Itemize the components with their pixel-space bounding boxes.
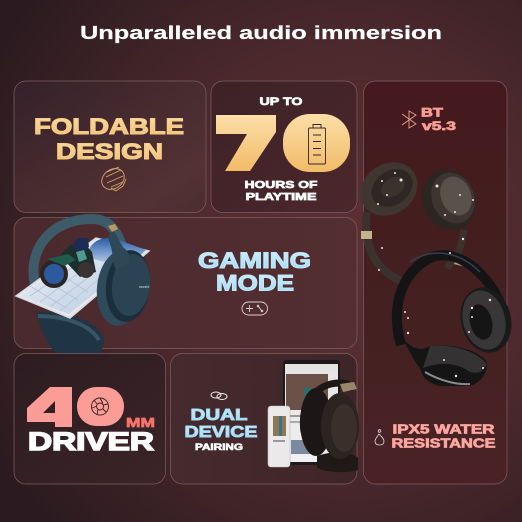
text: ipx5 water resistance bbox=[392, 422, 496, 450]
motorbike bbox=[42, 238, 96, 286]
panel: 70 hours of playtime bbox=[211, 81, 357, 212]
heading: gaming mode: GAMING bbox=[198, 248, 311, 273]
text: pairing: PAIRING bbox=[195, 442, 243, 452]
image: brown and black waterproof headphones bbox=[350, 151, 518, 386]
brown right cup bbox=[413, 162, 485, 238]
panel: gaming mode bbox=[14, 218, 357, 348]
number: 0 with battery bbox=[283, 114, 350, 172]
number: 4 bbox=[27, 387, 72, 427]
headband bbox=[33, 219, 127, 285]
icon: driver aperture bbox=[92, 398, 108, 415]
heading: foldable design: FOLDABLE bbox=[34, 114, 184, 139]
text: hours of playtime bbox=[244, 179, 318, 203]
black band bbox=[397, 255, 503, 345]
icon: bluetooth bbox=[402, 111, 416, 128]
heading: foldable design bbox=[34, 114, 184, 164]
brown band bbox=[366, 212, 408, 284]
text: bt v5.3: BT bbox=[421, 108, 443, 120]
icon: battery bbox=[308, 124, 326, 164]
icon: game controller pill bbox=[242, 302, 268, 315]
text: hours of playtime: PLAYTIME bbox=[246, 191, 316, 203]
black bottom cup bbox=[404, 340, 487, 386]
heading: dual device bbox=[184, 407, 258, 441]
panel: dual device pairing bbox=[170, 354, 359, 484]
phone screen bbox=[16, 238, 149, 318]
brown left cup bbox=[350, 151, 428, 227]
heading: gaming mode bbox=[198, 248, 311, 296]
image: phone bbox=[268, 406, 290, 467]
water droplets bbox=[377, 172, 491, 377]
icon: water drop bbox=[375, 430, 384, 445]
heading: dual device: DUAL bbox=[190, 407, 248, 424]
black right cup bbox=[454, 282, 518, 358]
text: mm: MM bbox=[126, 415, 155, 430]
heading: foldable design: DESIGN bbox=[56, 139, 163, 164]
text: hours of playtime: HOURS OF bbox=[244, 179, 318, 191]
panel: 40mm driver bbox=[14, 354, 166, 484]
number: 7 bbox=[216, 115, 276, 171]
text: bt v5.3: v5.3 bbox=[422, 121, 456, 133]
title: Unparalleled audio immersion bbox=[80, 23, 442, 43]
icon: link bbox=[211, 392, 227, 400]
icon: folded headphones bbox=[98, 164, 128, 194]
heading: dual device: DEVICE bbox=[184, 424, 258, 441]
text: ipx5 water resistance: RESISTANCE bbox=[392, 436, 496, 450]
bottom ear cup bbox=[36, 312, 104, 358]
text: bt v5.3 bbox=[421, 108, 456, 133]
number: 0 with aperture bbox=[77, 387, 124, 426]
image: tablet bbox=[283, 360, 340, 465]
image: blue headphones with phone and motorbike bbox=[16, 219, 154, 358]
heading: gaming mode: MODE bbox=[216, 270, 294, 296]
text: driver: DRIVER bbox=[28, 428, 154, 456]
panel: bluetooth and water resistance bbox=[364, 81, 507, 484]
panel: foldable design bbox=[14, 81, 206, 212]
image: dark headphones bbox=[300, 382, 359, 472]
text: up to: UP TO bbox=[260, 96, 303, 108]
text: ipx5 water resistance: IPX5 WATER bbox=[392, 422, 494, 436]
ear cup: moshi bbox=[139, 285, 149, 289]
